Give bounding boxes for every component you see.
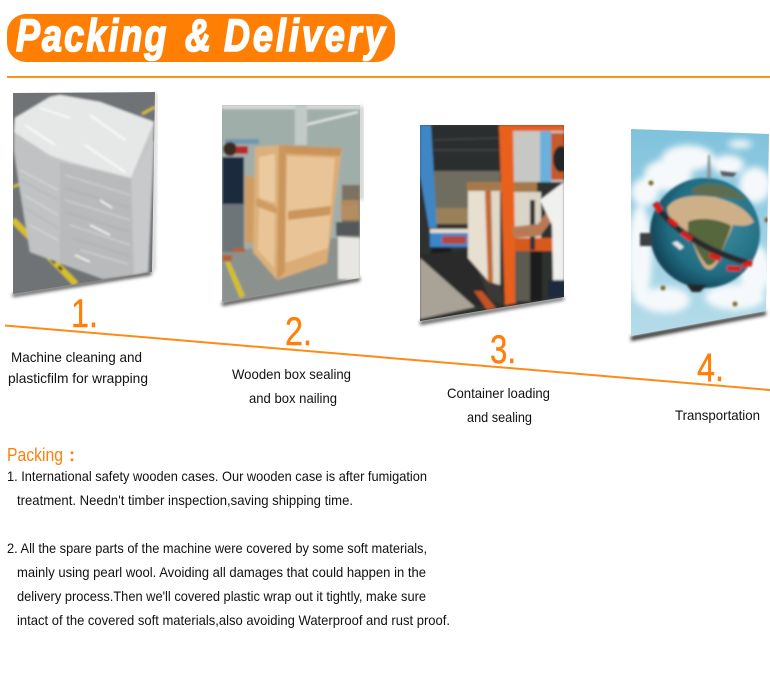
caption: step 1: plasticfilm for wrapping bbox=[8, 370, 148, 386]
title banner: Delivery bbox=[224, 10, 388, 61]
number 2: 2. bbox=[285, 310, 312, 354]
panel: step 4 photo, globe transportation bbox=[628, 127, 770, 341]
caption: step 2 bbox=[232, 366, 351, 406]
caption: step 1: Machine cleaning and bbox=[11, 349, 142, 365]
caption: step 3: and sealing bbox=[467, 409, 532, 425]
packing text block: treatment. Needn't timber inspection,saving shipping time. bbox=[17, 492, 353, 508]
packing text block: 1. International safety wooden cases. Our wooden case is after fumigation bbox=[7, 468, 427, 484]
title banner bbox=[7, 10, 395, 62]
header rule bbox=[7, 76, 770, 78]
packing text block: intact of the covered soft materials,also avoiding Waterproof and rust proof. bbox=[17, 612, 450, 628]
panel: step 3 photo, container loading bbox=[418, 123, 569, 325]
number 3: 3. bbox=[490, 328, 516, 372]
caption: step 4: Transportation bbox=[675, 407, 760, 423]
packing heading: : bbox=[69, 445, 75, 465]
panel: step 1 photo, plastic-wrapped machine bbox=[10, 90, 160, 300]
caption: step 3 bbox=[447, 385, 550, 425]
packing text block: 2. All the spare parts of the machine were covered by some soft materials, bbox=[7, 540, 427, 556]
packing text block: delivery process.Then we'll covered plastic wrap out it tightly, make sure bbox=[17, 588, 426, 604]
timeline line bbox=[5, 326, 770, 390]
caption: step 2: and box nailing bbox=[249, 390, 337, 406]
title banner: & bbox=[185, 10, 211, 61]
worker bbox=[222, 157, 244, 205]
caption: step 1 bbox=[8, 349, 148, 386]
number 1: 1. bbox=[71, 292, 98, 336]
packing text block: mainly using pearl wool. Avoiding all damages that could happen in the bbox=[17, 564, 426, 580]
caption: step 2: Wooden box sealing bbox=[232, 366, 351, 382]
packing heading: Packing bbox=[7, 445, 63, 465]
number 4: 4. bbox=[697, 346, 724, 390]
caption: step 3: Container loading bbox=[447, 385, 550, 401]
title banner: Packing bbox=[16, 10, 170, 61]
packing text block bbox=[7, 468, 450, 628]
crate bbox=[253, 145, 279, 280]
panel: step 2 photo, wooden box sealing bbox=[220, 103, 365, 308]
